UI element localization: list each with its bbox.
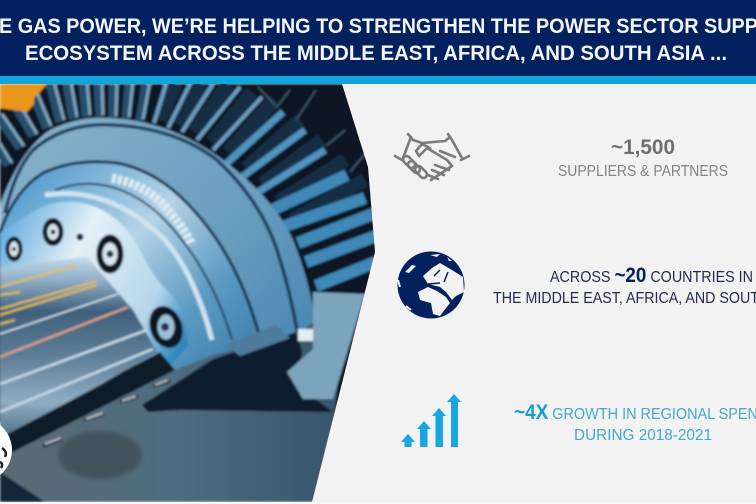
floor bolts: [43, 381, 170, 446]
heading: [0, 15, 756, 65]
turbine photo: [0, 82, 380, 502]
logo badge: [0, 425, 12, 475]
stat: suppliers: [558, 136, 728, 180]
stat: growth: DURING 2018-2021: [574, 427, 712, 444]
rotor bolts: [6, 218, 188, 353]
orange component: [0, 84, 47, 112]
rotor wheel: [0, 116, 314, 446]
heading: ECOSYSTEM ACROSS THE MIDDLE EAST, AFRICA, AND SOUTH ASIA ...: [25, 42, 727, 65]
bright disc: [0, 200, 188, 374]
machine floor: [1, 322, 339, 502]
bottom edge: [0, 502, 756, 504]
housing bracket: [287, 292, 365, 399]
icon: globe: [398, 252, 464, 318]
stat: suppliers: SUPPLIERS & PARTNERS: [558, 163, 728, 180]
header band: [0, 0, 756, 84]
stat: suppliers: ~1,500: [611, 136, 675, 159]
stat: countries: [493, 264, 756, 307]
turbine blades: [0, 82, 376, 286]
gear teeth: [112, 178, 192, 245]
icon: handshake: [395, 134, 469, 180]
rotor shaft: [0, 257, 157, 438]
stat: growth: [514, 401, 756, 444]
pit shadow: [142, 332, 333, 412]
icon: growth arrows: [401, 394, 461, 447]
